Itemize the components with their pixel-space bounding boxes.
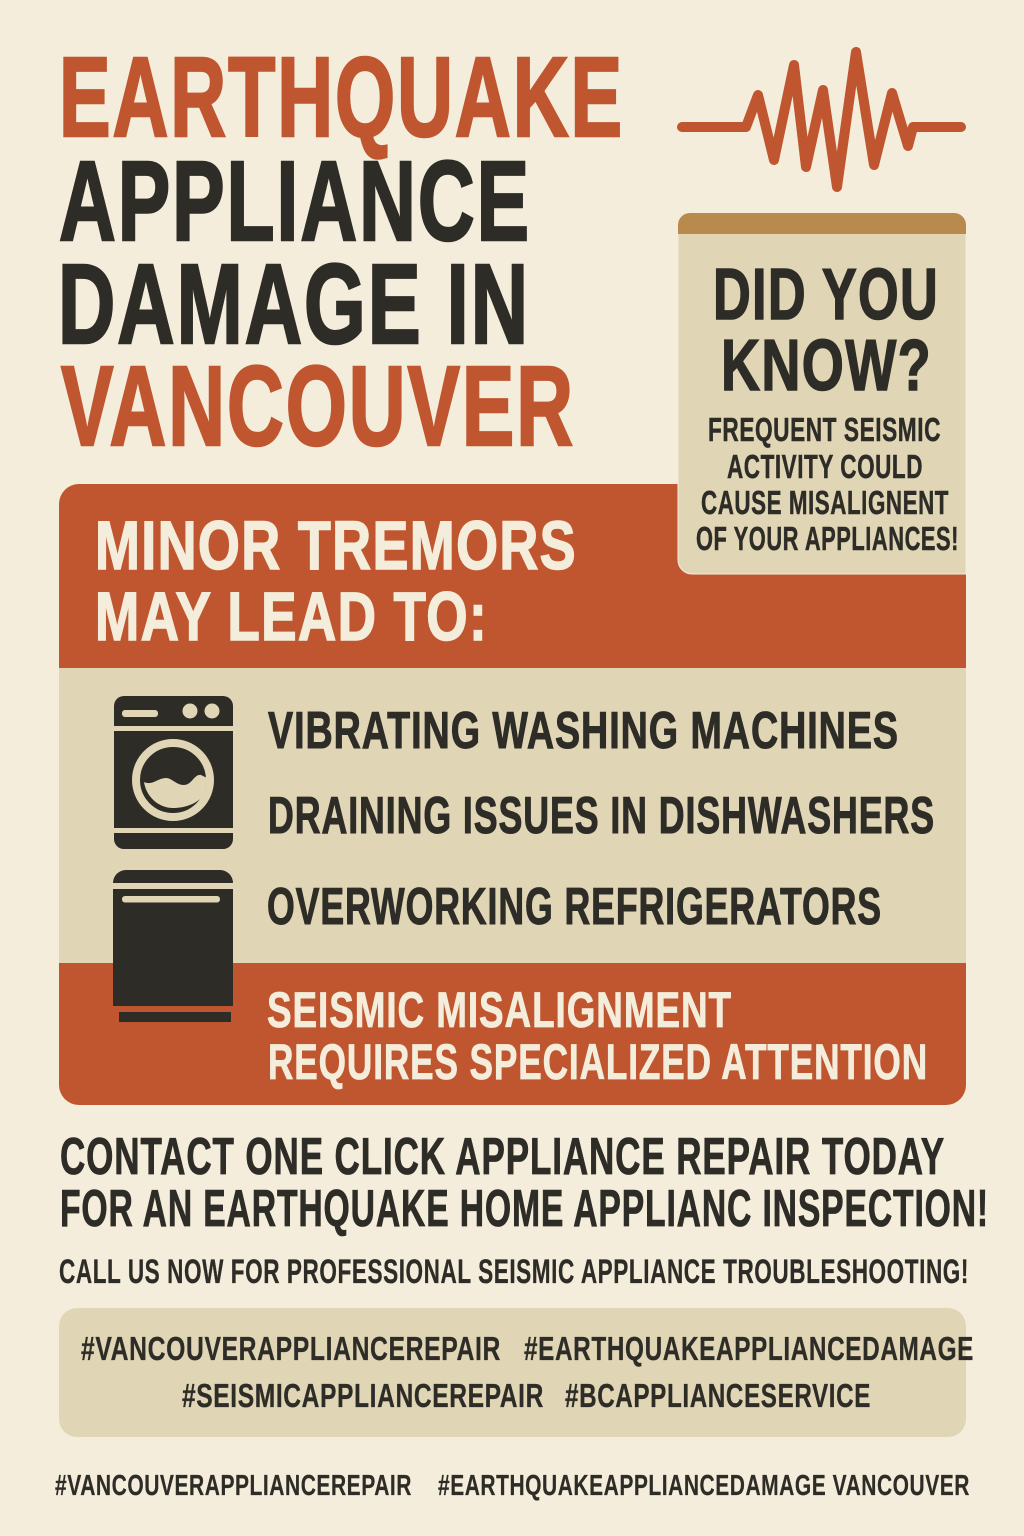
title: APPLIANCE: [59, 138, 531, 264]
title: [58, 34, 624, 469]
callout heading: KNOW?: [721, 326, 932, 406]
callout text: ACTIVITY COULD: [727, 448, 923, 485]
panel: hashtags: #SEISMICAPPLIANCEREPAIR: [182, 1377, 544, 1414]
symptom list: [267, 702, 935, 936]
icon: dishwasher: [113, 870, 233, 1022]
footer hashtags: #VANCOUVERAPPLIANCEREPAIR: [55, 1470, 412, 1502]
callout text: [696, 411, 959, 557]
heading: minor tremors: [95, 507, 577, 655]
list background: [59, 668, 966, 963]
panel: minor tremors: [59, 484, 966, 1105]
icon: seismograph wave: [682, 52, 961, 187]
call to action: [60, 1128, 989, 1238]
warning text: [267, 982, 928, 1090]
title: VANCOUVER: [61, 343, 575, 469]
callout: did you know: [678, 213, 966, 574]
panel: hashtags: #VANCOUVERAPPLIANCEREPAIR: [81, 1330, 501, 1367]
footer hashtags: [55, 1470, 970, 1502]
heading: minor tremors: MINOR TREMORS: [95, 507, 577, 584]
panel: hashtags: [59, 1308, 974, 1437]
panel: hashtags: #BCAPPLIANCESERVICE: [565, 1377, 871, 1414]
callout heading: [713, 255, 939, 406]
callout top bar: [678, 213, 966, 234]
title: DAMAGE IN: [58, 241, 530, 367]
warning text: SEISMIC MISALIGNMENT: [267, 982, 732, 1038]
callout heading: DID YOU: [713, 255, 939, 335]
icon: washing machine: [114, 696, 233, 849]
heading: minor tremors: MAY LEAD TO:: [95, 578, 488, 655]
title: EARTHQUAKE: [59, 34, 624, 160]
